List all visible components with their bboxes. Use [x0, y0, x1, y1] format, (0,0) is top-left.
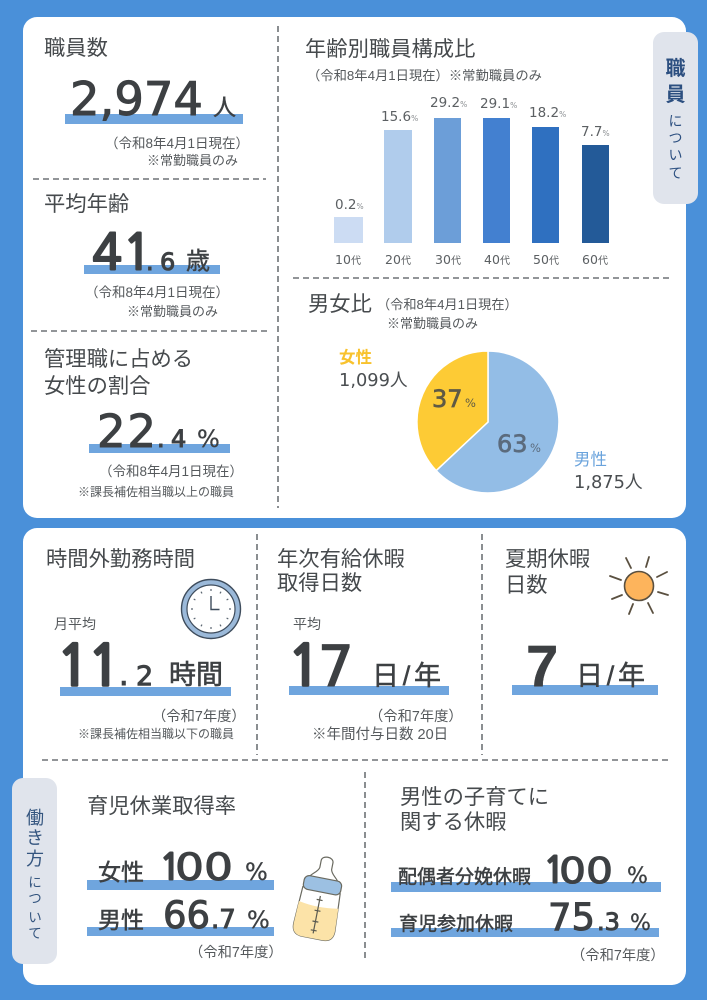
side tab: about work style: つ: [28, 891, 42, 906]
block: male childcare leave: 1: [543, 852, 565, 889]
side tab: about work style: に: [28, 875, 42, 890]
block: childcare leave rate: %: [245, 858, 268, 886]
side tab: about staff: つ: [668, 130, 682, 146]
block: summer leave: 日数: [505, 573, 548, 597]
bar chart: staff by age: 10代: [335, 252, 361, 267]
block: average age: ※常勤職員のみ: [127, 304, 218, 319]
block: female managers ratio: ※課長補佐相当職以上の職員: [78, 485, 234, 499]
block: number of staff: 人: [213, 94, 236, 120]
block: female managers ratio: 管理職に占める: [44, 347, 193, 371]
block: childcare leave rate: 女性: [98, 859, 144, 885]
block: age composition: 年齢別職員構成比: [305, 37, 475, 61]
block: male childcare leave: %: [630, 911, 651, 936]
block: overtime hours: 時間外勤務時間: [46, 547, 195, 571]
legend: male: 1,875人: [574, 472, 643, 493]
block: childcare leave rate: [87, 794, 349, 961]
side tab: about staff: て: [668, 165, 682, 181]
block: number of staff: [44, 36, 249, 168]
block: overtime hours: 1: [56, 639, 91, 695]
block: gender ratio: ※常勤職員のみ: [387, 316, 478, 331]
bar chart: staff by age: 30代: [435, 252, 461, 267]
block: male childcare leave: 育児参加休暇: [399, 913, 513, 935]
legend: female: 女性: [339, 348, 372, 367]
block: number of staff: ※常勤職員のみ: [147, 153, 238, 168]
block: summer leave: 日/年: [576, 661, 645, 691]
bar chart: staff by age: 50代: [533, 252, 559, 267]
block: summer leave: 夏期休暇: [505, 547, 590, 571]
legend: male: 男性: [574, 450, 607, 469]
side tab: about work style: [12, 778, 57, 964]
block: childcare leave rate: 育児休業取得率: [87, 794, 236, 818]
block: male childcare leave: [391, 785, 665, 964]
block: paid leave: 7: [318, 635, 354, 700]
block: overtime hours: （令和7年度）: [152, 708, 246, 725]
bar chart: staff by age: [334, 95, 610, 267]
block: paid leave: 日/年: [372, 661, 441, 691]
bar chart: staff by age: 60代: [582, 252, 608, 267]
block: gender ratio: [308, 292, 643, 493]
block: average age: .: [146, 248, 154, 276]
pie chart: gender: [417, 351, 559, 493]
block: female managers ratio: （令和8年4月1日現在）: [99, 464, 243, 479]
block: overtime hours: 時間: [169, 660, 223, 690]
block: childcare leave rate: 00: [175, 846, 233, 889]
block: male childcare leave: 配偶者分娩休暇: [398, 866, 531, 888]
side tab: about work style: 方: [26, 849, 44, 869]
block: overtime hours: [46, 547, 246, 741]
block: gender ratio: 男女比: [308, 292, 372, 316]
block: paid leave: 取得日数: [277, 571, 362, 595]
panel: work style: [12, 528, 686, 985]
block: paid leave: 1: [287, 639, 322, 695]
block: average age: [44, 192, 229, 319]
side tab: about staff: [653, 32, 698, 204]
side tab: about work style: て: [28, 926, 42, 941]
block: male childcare leave: .3: [597, 908, 620, 936]
block: paid leave: ※年間付与日数 20日: [312, 726, 448, 743]
block: average age: 41: [92, 229, 153, 278]
block: childcare leave rate: .7: [211, 905, 236, 935]
block: average age: （令和8年4月1日現在）: [85, 285, 229, 300]
block: number of staff: 職員数: [44, 36, 108, 60]
block: summer leave: [505, 547, 668, 699]
side tab: about staff: 員: [666, 84, 686, 106]
block: number of staff: （令和8年4月1日現在）: [105, 136, 249, 151]
block: age composition: [305, 37, 610, 267]
block: female managers ratio: .: [157, 425, 165, 453]
block: overtime hours: 1: [87, 639, 122, 695]
block: paid leave: 年次有給休暇: [277, 547, 405, 571]
panel: staff: [23, 17, 698, 518]
block: paid leave: 平均: [293, 616, 321, 632]
bar chart: staff by age: 15.6%: [381, 109, 418, 125]
block: number of staff: 2,974: [70, 72, 203, 126]
icon: sun: [610, 557, 668, 614]
bar chart: staff by age: 29.1%: [480, 96, 517, 112]
legend: female: [339, 348, 408, 391]
block: age composition: （令和8年4月1日現在）※常勤職員のみ: [307, 68, 542, 83]
bar chart: staff by age: 29.2%: [430, 95, 467, 111]
bar chart: staff by age: 20代: [385, 252, 411, 267]
side tab: about work style: き: [26, 828, 44, 848]
block: female managers ratio: [44, 347, 243, 499]
block: average age: 歳: [186, 248, 210, 275]
block: childcare leave rate: 男性: [98, 907, 144, 933]
block: overtime hours: 月平均: [54, 616, 96, 632]
bar chart: staff by age: 18.2%: [529, 105, 566, 121]
icon: clock: [182, 580, 240, 638]
pie chart: gender: 37: [432, 385, 463, 413]
block: overtime hours: 2: [136, 661, 153, 692]
block: male childcare leave: 関する休暇: [400, 810, 506, 834]
side tab: about staff: に: [668, 113, 682, 129]
block: childcare leave rate: 1: [159, 849, 181, 886]
block: female managers ratio: 女性の割合: [44, 374, 150, 398]
block: average age: 6: [160, 248, 175, 276]
side tab: about staff: 職: [666, 57, 686, 80]
bar chart: staff by age: 0.2%: [335, 197, 364, 213]
block: childcare leave rate: %: [247, 906, 270, 934]
block: female managers ratio: 22: [97, 405, 156, 458]
side tab: about work style: い: [28, 910, 42, 925]
bar chart: staff by age: 7.7%: [581, 124, 610, 140]
block: female managers ratio: 4: [171, 425, 186, 453]
block: childcare leave rate: 66: [163, 894, 210, 937]
block: overtime hours: .: [119, 658, 129, 693]
block: summer leave: 7: [526, 634, 558, 699]
legend: male: [574, 450, 643, 493]
legend: female: 1,099人: [339, 370, 408, 391]
block: male childcare leave: %: [627, 864, 648, 889]
pie chart: gender: %: [530, 441, 541, 455]
pie chart: gender: %: [465, 396, 476, 410]
side tab: about staff: い: [668, 147, 682, 163]
block: overtime hours: ※課長補佐相当職以下の職員: [78, 727, 234, 741]
block: gender ratio: （令和8年4月1日現在）: [377, 297, 518, 312]
bar chart: staff by age: 40代: [484, 252, 510, 267]
block: male childcare leave: 75: [548, 896, 595, 939]
block: male childcare leave: 男性の子育てに: [400, 785, 549, 809]
block: average age: 平均年齢: [44, 192, 129, 216]
side tab: about work style: 働: [26, 808, 44, 828]
pie chart: gender: 63: [497, 430, 528, 458]
icon: baby bottle: [292, 853, 349, 942]
block: paid leave: （令和7年度）: [369, 708, 463, 725]
block: male childcare leave: 00: [559, 851, 613, 892]
block: male childcare leave: （令和7年度）: [571, 947, 665, 964]
block: paid leave: [277, 547, 463, 743]
block: female managers ratio: %: [197, 425, 220, 453]
block: childcare leave rate: （令和7年度）: [189, 944, 283, 961]
